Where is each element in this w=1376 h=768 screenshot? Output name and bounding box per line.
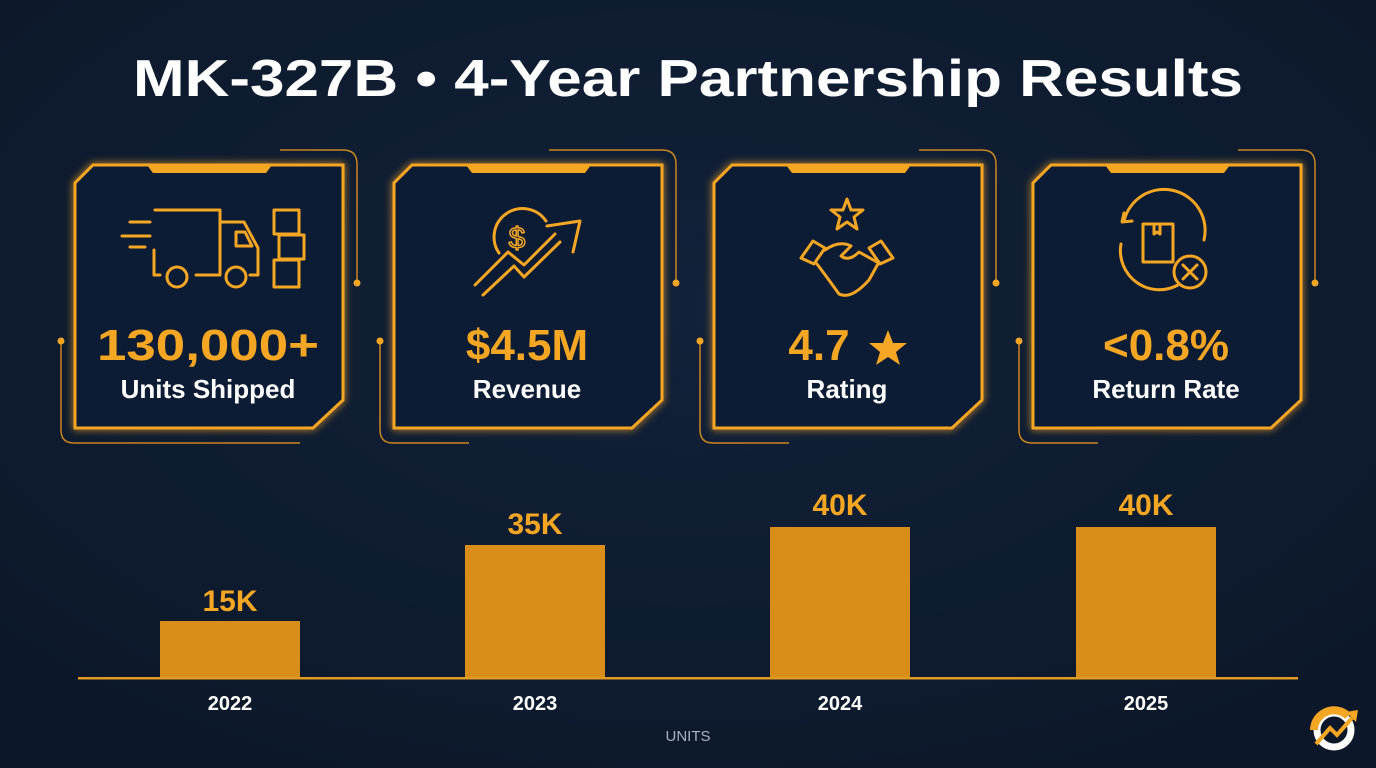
panel: revenue: Revenue [473,374,581,404]
panel: rating: Rating [807,374,887,404]
panel: return rate [1016,150,1318,443]
bar: 2024: 2024 [818,693,863,715]
icon: star [869,330,907,365]
icon: truck [122,210,304,287]
bar: 2023: 35K [507,508,563,541]
axis label: UNITS [666,728,710,745]
panel: revenue [376,150,680,443]
icon: logo [1314,710,1358,747]
icon: return [1120,189,1206,290]
bar: 2023 [465,508,605,715]
bar chart [78,489,1298,715]
icon: revenue [475,209,580,295]
panel: revenue: $4.5M [466,321,588,370]
panel: return rate: <0.8% [1103,321,1229,370]
label: Units Shipped [121,374,295,404]
bar: 2025: 2025 [1124,693,1168,715]
bar: 2022: 2022 [208,693,252,715]
panel: rating [696,150,1000,443]
bar: 2024 [770,489,910,715]
title: MK-327B • 4-Year Partnership Results [133,50,1243,108]
value: 130,000+ [97,321,319,370]
panel: return rate: Return Rate [1092,374,1240,404]
panel: rating: 4.7 [788,321,850,370]
bar: 2022: 15K [202,585,258,618]
bar: 2024: 40K [812,489,868,522]
bar: 2025 [1076,489,1216,715]
panel: units shipped [58,150,360,443]
bar: 2022 [160,585,300,715]
bar: 2025: 40K [1118,489,1174,522]
icon: handshake [801,199,893,295]
bar: 2023: 2023 [513,693,557,715]
icon: revenue: $ [509,222,526,255]
